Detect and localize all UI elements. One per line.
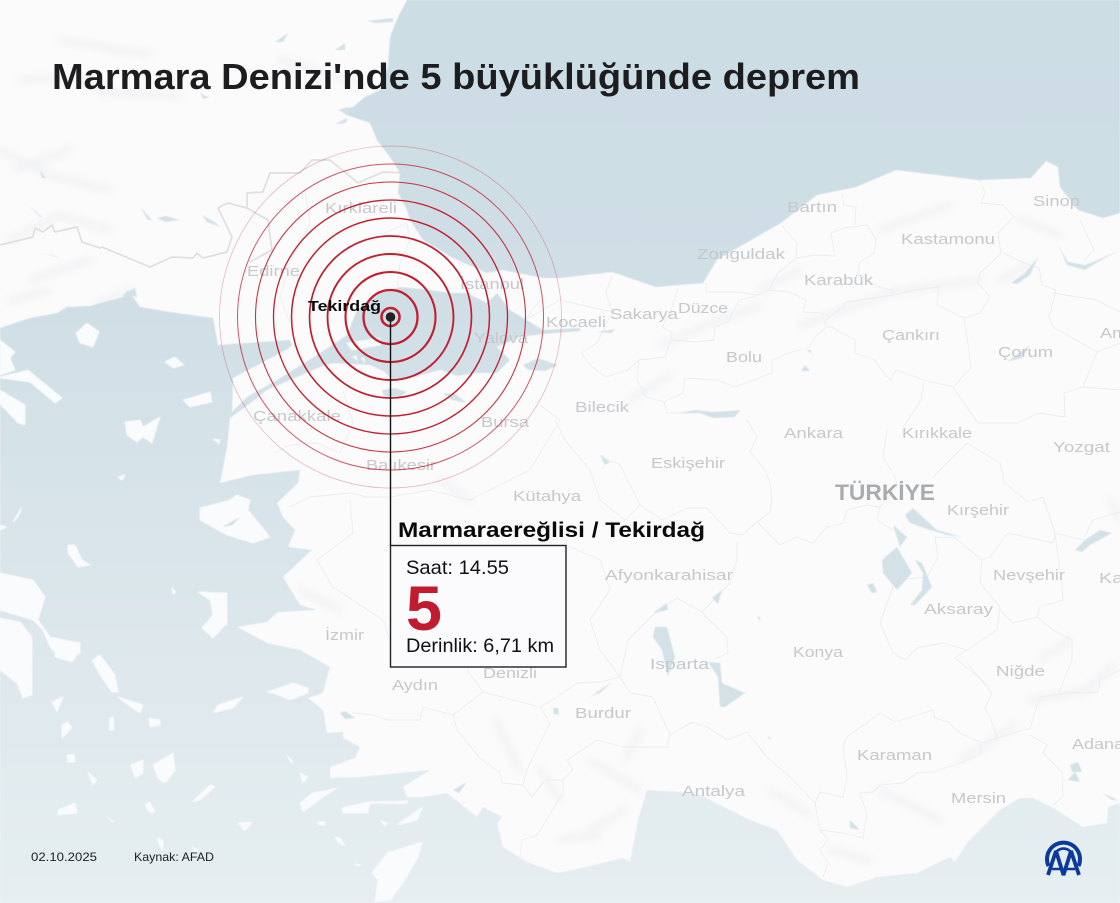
depth: Derinlik: 6,71 km (406, 635, 554, 657)
label: Çanakkale: Çanakkale (253, 408, 341, 425)
label: Kastamonu: Kastamonu (901, 231, 995, 248)
label: Aydın: Aydın (392, 677, 438, 694)
source: Kaynak: AFAD (134, 850, 214, 864)
label: Sakarya: Sakarya (610, 306, 679, 323)
Bulgaria and Greece borders (0, 160, 403, 267)
label: Tekirdağ: Tekirdağ (308, 298, 381, 315)
leader line from epicentre to info box (390, 317, 392, 546)
label: Bartın: Bartın (787, 199, 837, 216)
label: Bilecik: Bilecik (575, 399, 630, 416)
label: Niğde: Niğde (996, 663, 1045, 680)
Black Sea (340, 0, 1120, 287)
panel: earthquake info box (390, 546, 566, 667)
label: İzmir: İzmir (325, 626, 364, 644)
magnitude: 5 (406, 574, 442, 644)
time: Saat: 14.55 (406, 557, 509, 579)
label: Bursa: Bursa (481, 414, 530, 431)
label: Eskişehir: Eskişehir (651, 455, 725, 472)
label: Karabük: Karabük (804, 272, 874, 289)
label: Afyonkarahisar: Afyonkarahisar (605, 567, 733, 584)
date: 02.10.2025 (31, 850, 97, 864)
epicentre dot (386, 312, 395, 322)
label: Aksaray: Aksaray (924, 601, 994, 618)
city labels (247, 193, 1120, 807)
label: Antalya: Antalya (682, 783, 746, 800)
location heading: Marmaraereğlisi / Tekirdağ (398, 519, 705, 542)
label: Çankırı: Çankırı (882, 327, 940, 344)
label: Adana: Adana (1072, 736, 1120, 753)
label: Bolu: Bolu (726, 349, 762, 366)
label: Edirne: Edirne (247, 263, 300, 280)
label: Mersin: Mersin (951, 790, 1006, 807)
province boundaries (275, 180, 1120, 877)
label: Kırıkkale: Kırıkkale (902, 425, 972, 442)
label: Isparta: Isparta (650, 656, 710, 673)
label: İstanbul: İstanbul (460, 275, 524, 293)
label: Ankara: Ankara (784, 425, 844, 442)
label: Kırşehir: Kırşehir (947, 502, 1009, 519)
icon: Anadolu Agency logo (1047, 843, 1080, 875)
label: TÜRKİYE: TÜRKİYE (835, 480, 935, 505)
label: Denizli: Denizli (483, 665, 537, 682)
label: Sinop: Sinop (1033, 193, 1080, 210)
label: Karaman: Karaman (857, 747, 932, 764)
label: Kütahya: Kütahya (513, 488, 582, 505)
label: Balıkesir: Balıkesir (366, 457, 436, 474)
label: Nevşehir: Nevşehir (993, 567, 1065, 584)
label: Kocaeli: Kocaeli (546, 314, 606, 331)
label: Yozgat: Yozgat (1053, 439, 1111, 456)
label: Düzce: Düzce (678, 300, 728, 317)
label: Yalova: Yalova (474, 330, 529, 347)
title: Marmara Denizi'nde 5 büyüklüğünde deprem (52, 56, 860, 97)
label: Konya: Konya (793, 644, 844, 661)
label: Burdur: Burdur (575, 705, 631, 722)
earthquake concentric rings (220, 146, 562, 488)
label: Çorum: Çorum (998, 344, 1053, 361)
label: Kırklareli: Kırklareli (325, 200, 397, 217)
islands and peninsulas (0, 323, 423, 902)
label: Zonguldak: Zonguldak (697, 246, 786, 263)
Aegean, Marmara and Mediterranean (0, 287, 1120, 903)
